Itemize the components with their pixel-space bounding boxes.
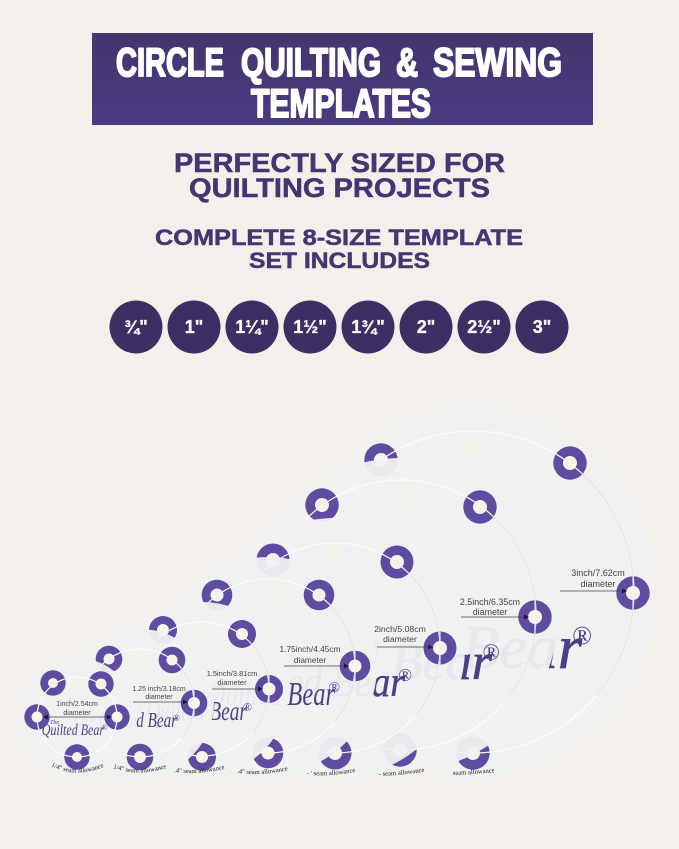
template: 1.75 inch: ® (329, 680, 340, 696)
label: 2.5 inch diameter (460, 597, 529, 620)
label: 1.25 inch diameter: 1.25 inch/3.18cm (132, 686, 186, 693)
template: 2 inch: The Quilted Bear (143, 658, 405, 705)
title banner: & (396, 41, 418, 85)
label: 1 inch diameter: 1inch/2.54cm (56, 701, 98, 708)
template: 1.75 inch: The Quilted Bear (165, 676, 335, 713)
template: 1 inch (18, 658, 136, 776)
label: 1.5 inch diameter: 1.5inch/3.81cm (207, 669, 257, 678)
heading: complete set: SET INCLUDES (249, 248, 430, 273)
label: 1.75 inch diameter: diameter (294, 655, 326, 665)
template: 2.5 inch: The Quilted Bear (131, 634, 493, 691)
template: 1.25 inch: ® (173, 713, 180, 723)
title banner (92, 33, 593, 126)
size badges: ¾" (124, 317, 148, 337)
heading: complete set: COMPLETE 8-SIZE TEMPLATE (155, 225, 523, 250)
template: 1 inch: Quilted Bear (42, 721, 104, 740)
label: 1.25 inch diameter (132, 686, 188, 704)
size badges: 1¼" (235, 317, 269, 337)
template: 3 inch: ® (572, 621, 592, 650)
label: 1 inch diameter: diameter (63, 710, 91, 717)
seam allowance captions (52, 762, 494, 776)
template: 2 inch: ® (398, 665, 412, 685)
title banner: CIRCLE (116, 41, 224, 85)
size badges: 1" (185, 317, 203, 337)
template: 2.5 inch: ® (483, 640, 500, 665)
seam allowance captions: seam allowance (453, 769, 494, 775)
label: 2.5 inch diameter: 2.5inch/6.35cm (460, 597, 520, 607)
template: 3 inch (152, 410, 655, 774)
template: 1 inch: The (50, 720, 59, 726)
template: 1.75 inch (159, 557, 377, 775)
size badges: 1½" (293, 317, 327, 337)
seam allowance captions: .4" seam allowance (174, 766, 224, 774)
label: 1 inch diameter (43, 701, 112, 720)
template: 1.5 inch: The Quilted Bear (112, 697, 248, 727)
seam allowance captions: - seam allowance (379, 768, 424, 776)
template: 2 inch (143, 518, 465, 778)
label: 1.25 inch diameter: diameter (145, 694, 173, 701)
title banner: TEMPLATES (251, 82, 431, 126)
heading: perfectly sized: QUILTING PROJECTS (189, 173, 490, 203)
template: 1.5 inch: ® (243, 700, 252, 714)
title banner: QUILTING (241, 41, 381, 85)
label: 1.5 inch diameter (207, 669, 263, 692)
label: 3 inch diameter: 3inch/7.62cm (571, 568, 625, 578)
size badges (110, 300, 568, 354)
label: 2.5 inch diameter: diameter (473, 607, 507, 617)
label: 1.75 inch diameter (280, 644, 349, 668)
seam allowance captions: 1/4" seam allowance (52, 762, 104, 772)
template: 1.25 inch: The Quilted Bear (72, 709, 178, 732)
heading: complete set (155, 225, 523, 273)
template: 3 inch: The Quilted Bear (152, 614, 583, 682)
size badges: 1¾" (351, 317, 385, 337)
seam allowance captions: .4" seam allowance (238, 767, 288, 774)
size badges: 2½" (467, 317, 501, 337)
size badges: 2" (417, 317, 435, 337)
label: 3 inch diameter: diameter (580, 579, 616, 589)
heading: perfectly sized (174, 148, 505, 203)
label: 1.5 inch diameter: diameter (217, 678, 247, 687)
label: 2 inch diameter: 2inch/5.08cm (374, 624, 426, 634)
template: 1.25 inch (66, 629, 214, 777)
title banner: SEWING (433, 41, 562, 85)
seam allowance captions: - ' seam allowance (307, 769, 356, 776)
template: 1 inch: ® (102, 724, 108, 732)
template: 1.5 inch (112, 602, 289, 776)
template: 2.5 inch (131, 458, 558, 772)
label: 2 inch diameter (374, 624, 433, 650)
size badges: 3" (533, 317, 551, 337)
label: 1.75 inch diameter: 1.75inch/4.45cm (280, 644, 341, 654)
seam allowance captions: 1/4" seam allowance (114, 764, 166, 772)
label: 3 inch diameter (560, 568, 627, 594)
label: 2 inch diameter: diameter (383, 634, 417, 644)
heading: perfectly sized: PERFECTLY SIZED FOR (174, 148, 505, 178)
